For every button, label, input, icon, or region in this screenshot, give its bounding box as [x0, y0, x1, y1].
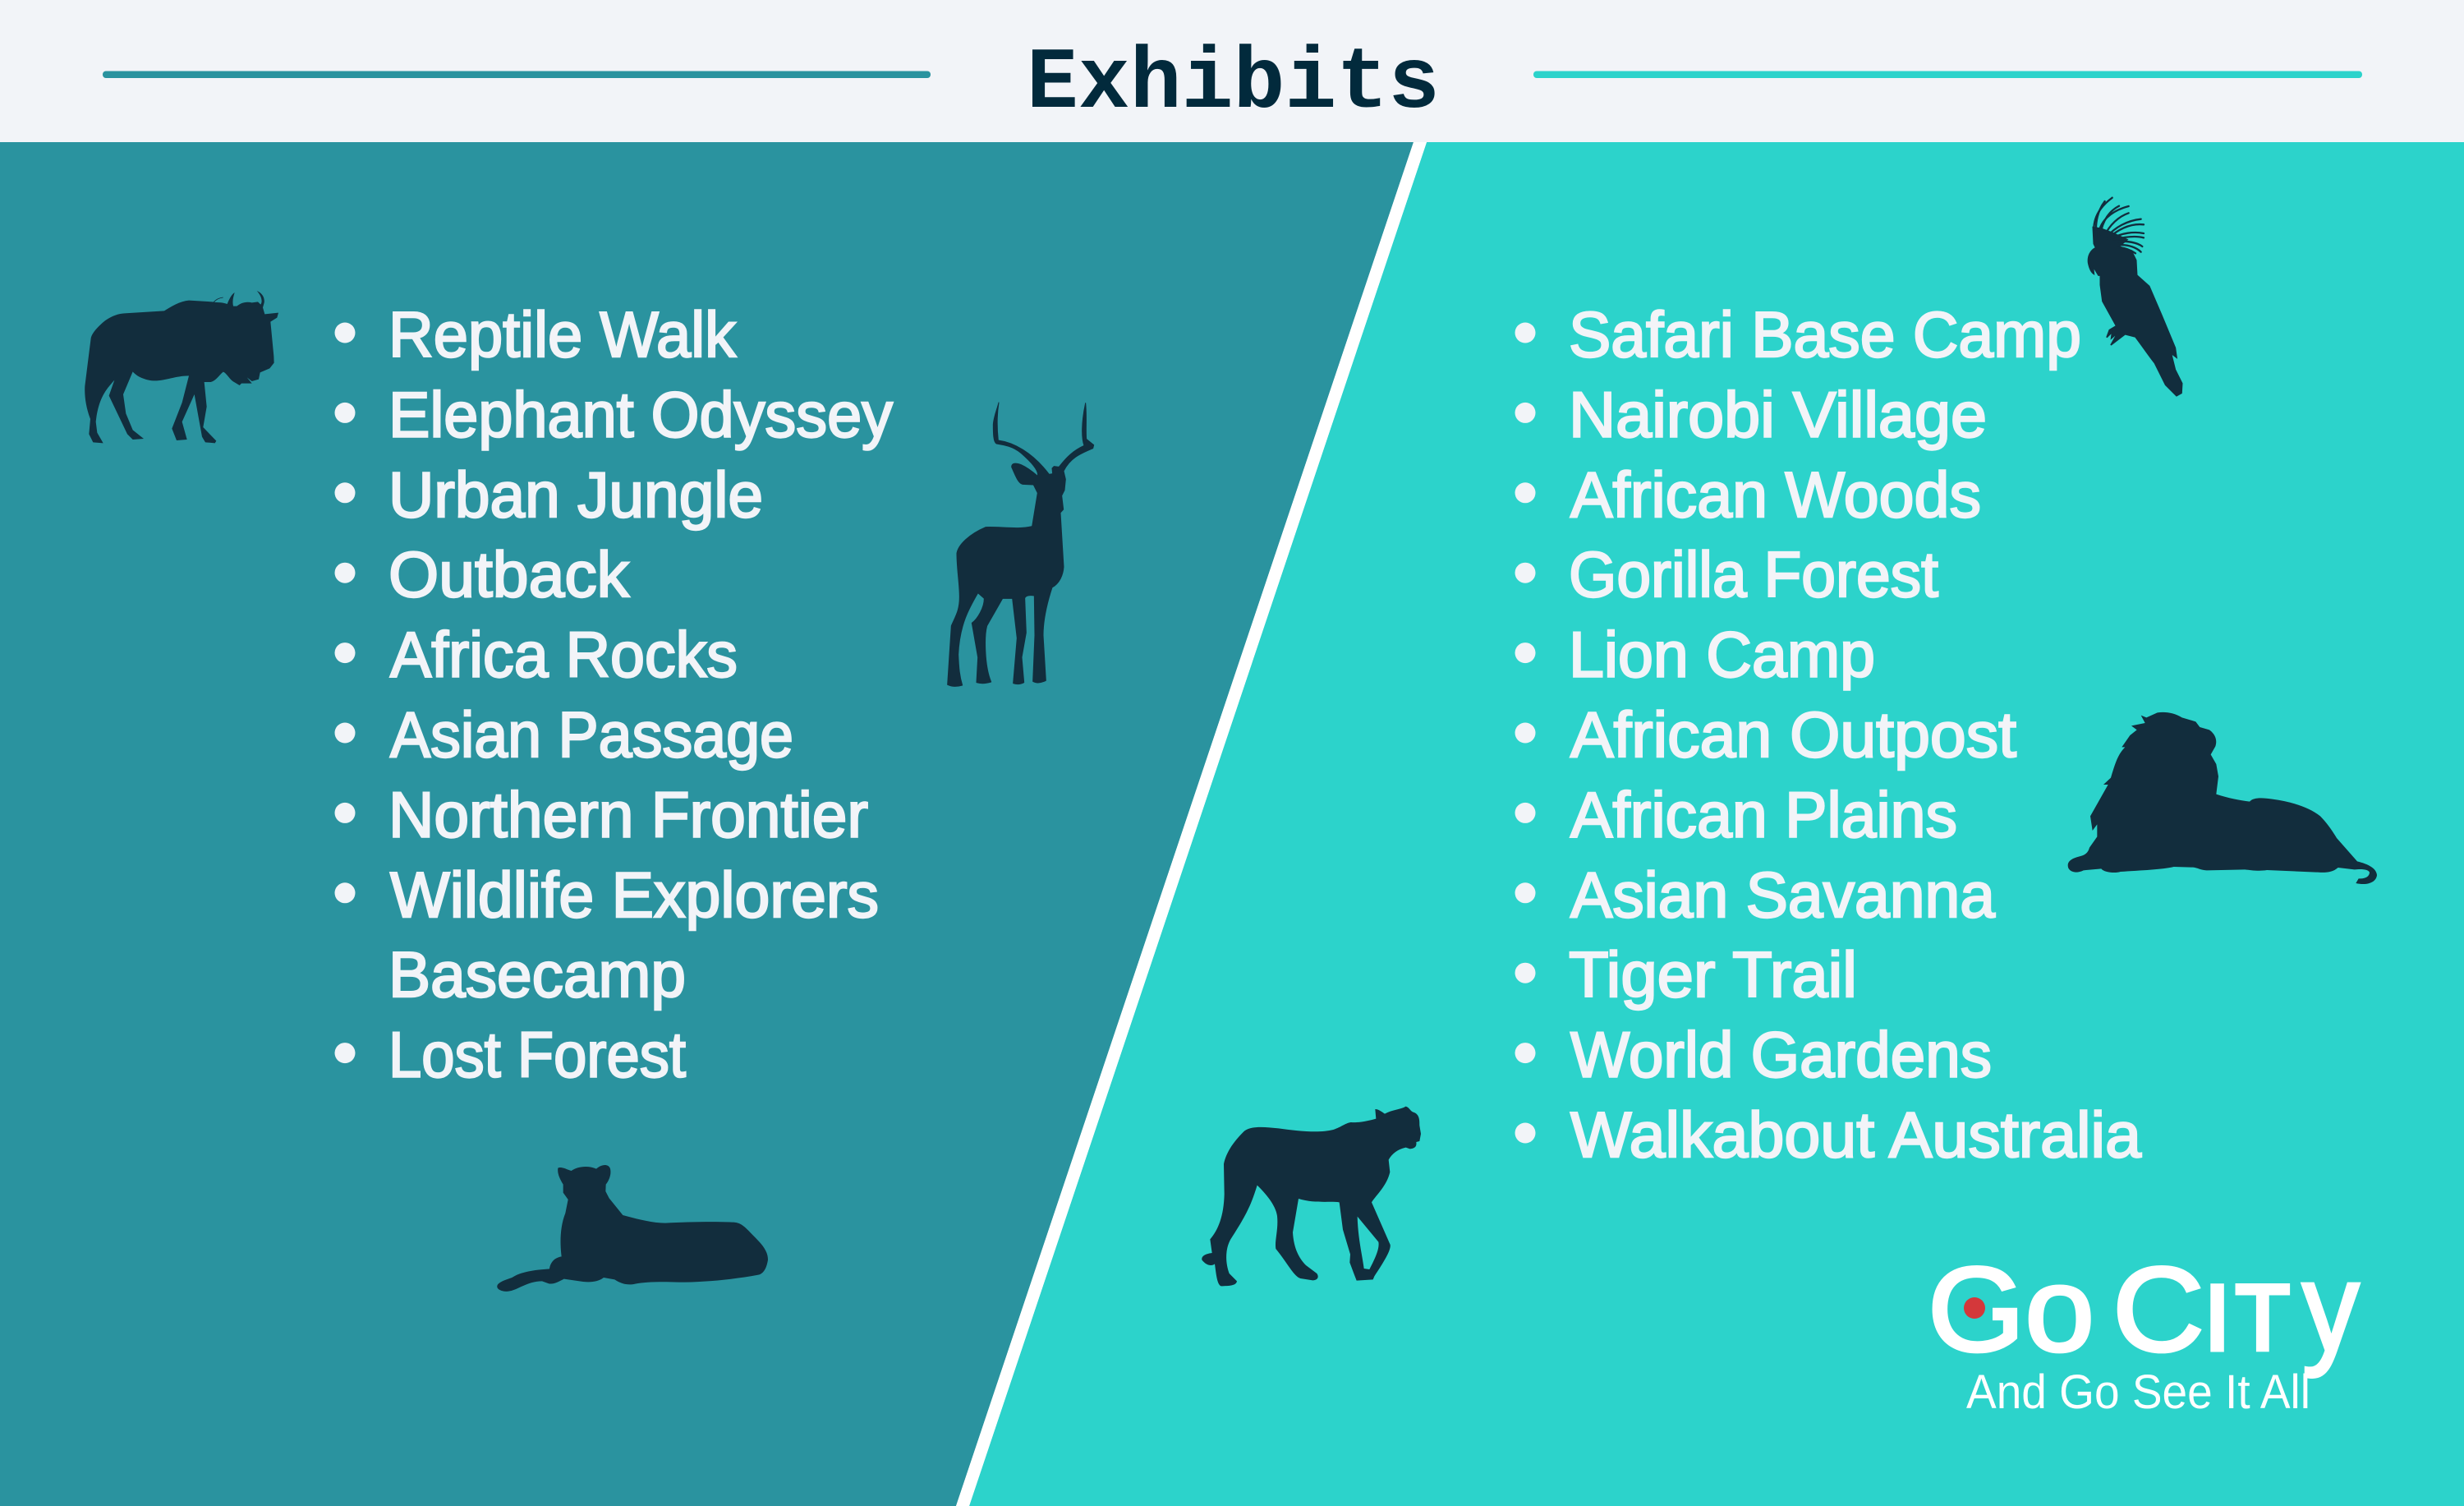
heading: right rule	[1533, 71, 2362, 78]
item: Lost Forest: Lost Forest	[388, 1019, 686, 1091]
list: right exhibits	[1515, 298, 2142, 1171]
item: Africa Rocks: Africa Rocks	[390, 619, 738, 691]
item: Northern Frontier: Northern Frontier	[388, 778, 868, 850]
item: Lion Camp: Lion Camp	[1569, 619, 1875, 691]
icon: wildebeest silhouette	[85, 291, 278, 443]
icon: cheetah silhouette	[1202, 1107, 1421, 1286]
panel: left teal background	[0, 142, 1414, 1506]
item: Asian Savanna: Asian Savanna	[1570, 859, 1996, 931]
icon: resting leopard silhouette	[497, 1165, 768, 1292]
logo wordmark: City	[2112, 1237, 2359, 1379]
item: African Plains: African Plains	[1570, 778, 1957, 850]
item: African Woods: African Woods	[1570, 458, 1981, 531]
diagonal white divider	[956, 142, 1427, 1506]
item: Gorilla Forest: Gorilla Forest	[1569, 538, 1938, 610]
item: Wildlife Explorers Basecamp: Basecamp	[388, 938, 686, 1011]
item: Safari Base Camp: Safari Base Camp	[1569, 298, 2081, 371]
icon: cockatoo silhouette	[2088, 198, 2182, 396]
item: Reptile Walk: Reptile Walk	[388, 298, 737, 371]
logo G interior clearing	[1956, 1294, 1993, 1324]
item: African Outpost: African Outpost	[1570, 698, 2016, 771]
item: Wildlife Explorers Basecamp	[335, 859, 879, 1011]
logo wordmark: City: y	[2302, 1237, 2359, 1379]
logo wordmark: City: T	[2236, 1268, 2290, 1370]
panel: right turquoise background	[969, 142, 2464, 1506]
logo wordmark: Go: Go	[1928, 1242, 2094, 1376]
item: Tiger Trail: Tiger Trail	[1569, 938, 1857, 1011]
item: Urban Jungle: Urban Jungle	[388, 458, 763, 531]
logo red dot	[1964, 1297, 1985, 1319]
item: Nairobi Village: Nairobi Village	[1569, 378, 1987, 450]
logo wordmark: City: C	[2112, 1242, 2204, 1376]
icon: lion silhouette	[2068, 712, 2377, 884]
logo wordmark: City: I	[2204, 1267, 2230, 1369]
item: Wildlife Explorers Basecamp: Wildlife Explorers	[390, 859, 879, 931]
title: Exhibits	[1027, 35, 1440, 133]
icon: impala silhouette	[948, 403, 1094, 686]
logo tagline: And Go See It All	[1966, 1366, 2310, 1419]
heading: left rule	[103, 71, 931, 78]
logo: Go City	[1928, 1237, 2359, 1419]
item: Outback: Outback	[388, 538, 630, 610]
item: World Gardens: World Gardens	[1570, 1019, 1992, 1091]
list: left exhibits	[335, 298, 893, 1091]
item: Elephant Odyssey: Elephant Odyssey	[388, 378, 893, 450]
item: Asian Passage: Asian Passage	[390, 698, 793, 771]
item: Walkabout Australia: Walkabout Australia	[1570, 1098, 2142, 1171]
